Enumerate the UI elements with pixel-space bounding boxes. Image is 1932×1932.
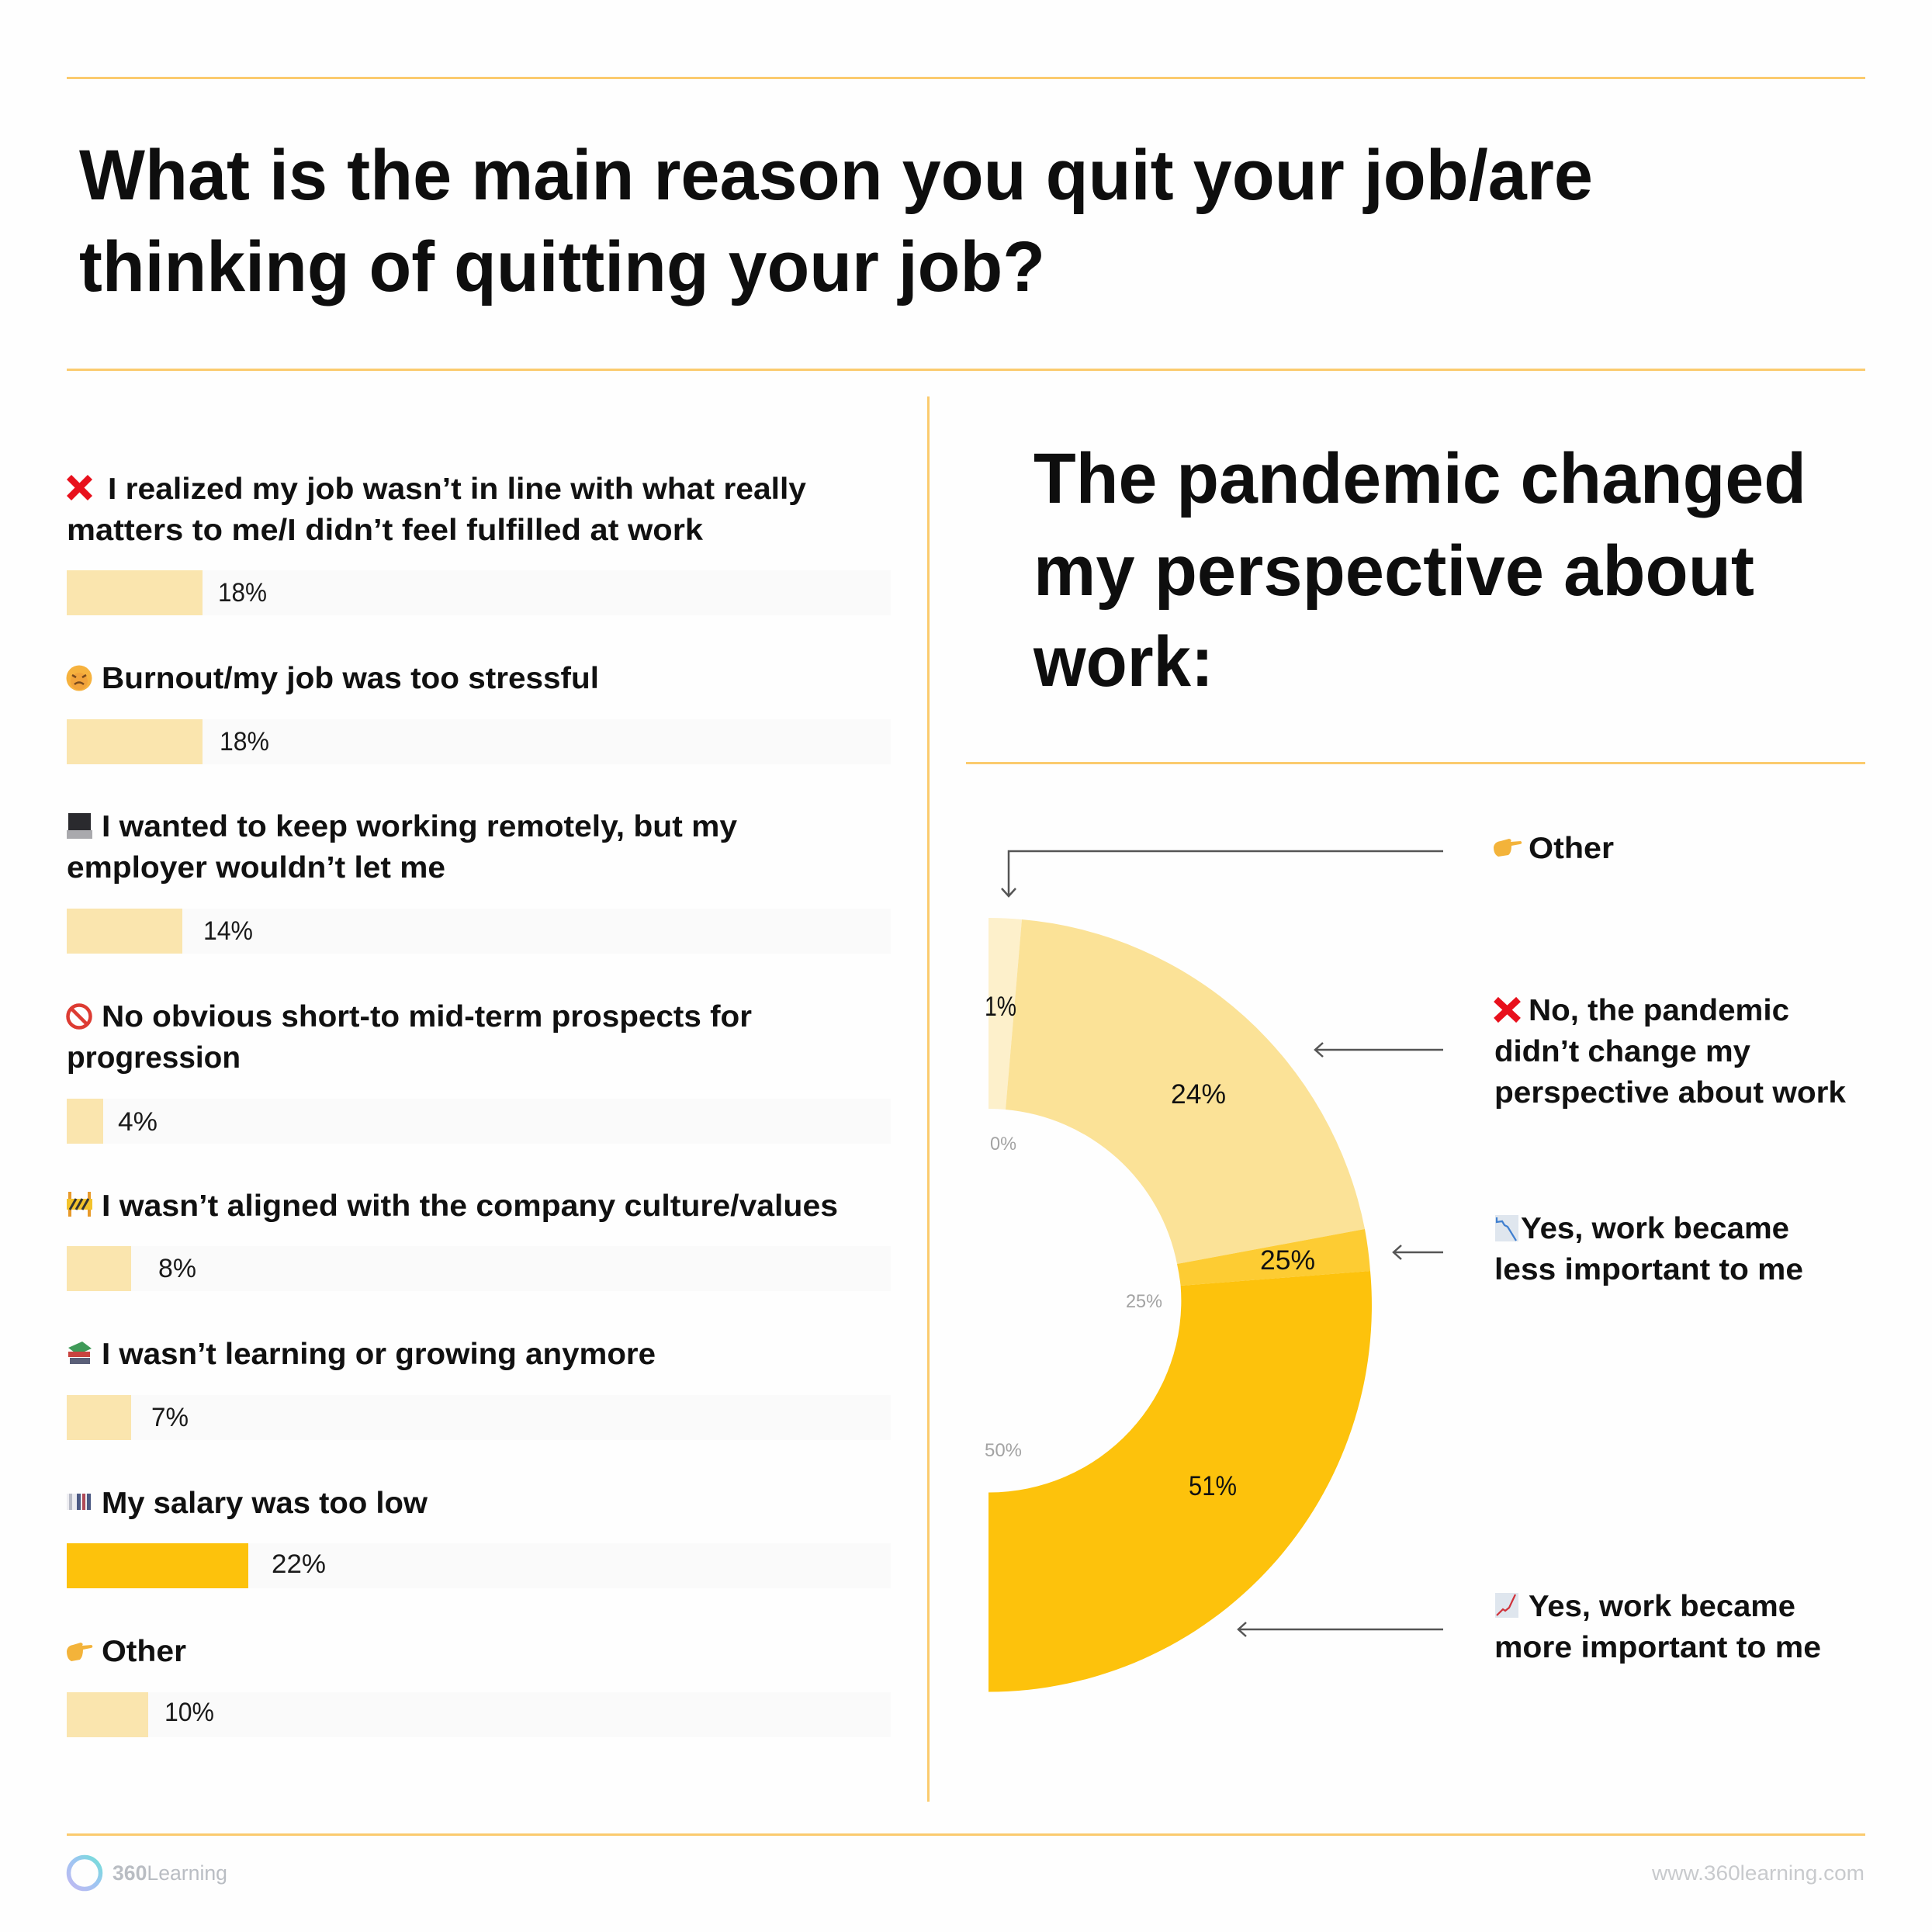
bar: 4%: 4%	[118, 1107, 158, 1137]
item: culture	[67, 1189, 891, 1291]
icon: pointing hand	[67, 1643, 92, 1661]
label: no change: didn’t change my	[1494, 1035, 1750, 1068]
bar: 4%	[67, 1099, 891, 1144]
value labels: 24%	[1171, 1079, 1226, 1110]
value labels: 51%	[1189, 1471, 1237, 1501]
label: less important: Yes, work became	[1521, 1212, 1789, 1245]
label: learning: I wasn’t learning or growing anymore	[102, 1338, 656, 1371]
title: What is the main reason you quit your job/are	[79, 136, 1593, 215]
bar: 10%	[67, 1692, 891, 1737]
bar: 8%	[67, 1246, 891, 1291]
bar: 18%: 18%	[218, 578, 267, 608]
label: not fulfilled: I realized my job wasn’t in line with what really	[108, 473, 806, 506]
bar: 7%: 7%	[151, 1403, 189, 1432]
bar: 22%	[67, 1543, 891, 1588]
value labels: 1%	[985, 992, 1016, 1022]
segment: more important 51%	[989, 1271, 1372, 1691]
footer	[68, 1858, 1864, 1889]
item: remote work	[67, 810, 891, 954]
label: burnout: Burnout/my job was too stressful	[102, 662, 599, 695]
segment: no change 24%	[1006, 919, 1365, 1264]
label: no progression: progression	[67, 1041, 241, 1075]
label: no progression: No obvious short-to mid-term prospects for	[102, 1000, 752, 1034]
legend: no change	[1315, 994, 1846, 1110]
arrow: more important	[1238, 1622, 1443, 1636]
label: less important: less important to me	[1494, 1253, 1803, 1286]
logo: 360Learning: 360Learning	[113, 1861, 227, 1885]
label: not fulfilled	[67, 473, 806, 547]
legend: less important	[1394, 1212, 1803, 1286]
icon: banknotes	[67, 1494, 92, 1510]
item: not fulfilled	[67, 473, 891, 615]
label: no change: No, the pandemic	[1529, 994, 1789, 1027]
label: other: Other	[102, 1635, 186, 1668]
segment: less important 25%	[1177, 1229, 1370, 1286]
bar: 18%: 18%	[220, 727, 269, 757]
value labels: 25%	[1260, 1245, 1315, 1276]
panel: pandemic perspective	[985, 439, 1846, 1691]
logo: 360Learning	[68, 1858, 227, 1889]
title	[79, 136, 1593, 306]
bar: 14%	[67, 909, 891, 954]
segment: other 1%	[989, 918, 1022, 1110]
label: more important	[1494, 1590, 1821, 1664]
label: salary: My salary was too low	[102, 1487, 428, 1520]
bar: 22%: 22%	[272, 1549, 326, 1579]
bar: 18%	[67, 570, 891, 615]
label: not fulfilled: matters to me/I didn’t feel fulfilled at work	[67, 514, 703, 547]
arrow: no change	[1315, 1043, 1443, 1057]
bar: 10%: 10%	[164, 1698, 214, 1727]
label: less important	[1494, 1212, 1803, 1286]
icon: pointing hand	[1494, 839, 1522, 857]
semi-donut chart	[985, 918, 1372, 1691]
legend: other	[1002, 832, 1614, 896]
axis labels: 50%	[985, 1440, 1022, 1461]
bar: 18%	[67, 719, 891, 764]
label: remote work: employer wouldn’t let me	[67, 851, 445, 885]
bar: 8%: 8%	[158, 1254, 196, 1283]
item: burnout	[67, 662, 891, 764]
item: other	[67, 1635, 891, 1737]
heading: pandemic perspective: my perspective about	[1034, 531, 1754, 611]
arrow: other	[1002, 851, 1443, 896]
website url: www.360learning.com	[1651, 1861, 1864, 1885]
label: remote work	[67, 810, 737, 885]
title: thinking of quitting your job?	[79, 227, 1045, 306]
label: no change: perspective about work	[1494, 1076, 1846, 1110]
heading: pandemic perspective: The pandemic changed	[1034, 439, 1806, 518]
legend: more important	[1238, 1590, 1821, 1664]
icon: laptop	[67, 813, 92, 839]
label: other: Other	[1529, 832, 1614, 865]
item: salary	[67, 1487, 891, 1588]
icon: chart down	[1495, 1215, 1518, 1241]
panel: reasons bar chart	[67, 473, 891, 1737]
icon: construction barrier	[67, 1192, 92, 1217]
axis labels: 25%	[1126, 1291, 1162, 1312]
bar: 14%: 14%	[203, 916, 253, 946]
icon: red cross	[69, 477, 90, 498]
heading: pandemic perspective	[1033, 439, 1806, 701]
label: no change	[1494, 994, 1846, 1110]
item: learning	[67, 1338, 891, 1440]
axis labels: 0%	[990, 1134, 1016, 1155]
item: no progression	[67, 1000, 891, 1144]
value labels	[985, 992, 1315, 1501]
icon: no entry sign	[68, 1006, 90, 1027]
label: no progression	[67, 1000, 752, 1075]
icon: red cross	[1496, 999, 1518, 1020]
icon: books	[68, 1342, 92, 1364]
label: more important: more important to me	[1494, 1631, 1821, 1664]
bar: 7%	[67, 1395, 891, 1440]
heading: pandemic perspective: work:	[1033, 622, 1214, 701]
label: remote work: I wanted to keep working remotely, but my	[102, 810, 737, 843]
axis labels	[985, 1134, 1162, 1461]
icon: chart up	[1495, 1593, 1518, 1618]
icon: tired face	[67, 666, 92, 691]
label: culture: I wasn’t aligned with the company culture/values	[102, 1189, 838, 1223]
arrow: less important	[1394, 1245, 1443, 1259]
label: more important: Yes, work became	[1529, 1590, 1795, 1623]
